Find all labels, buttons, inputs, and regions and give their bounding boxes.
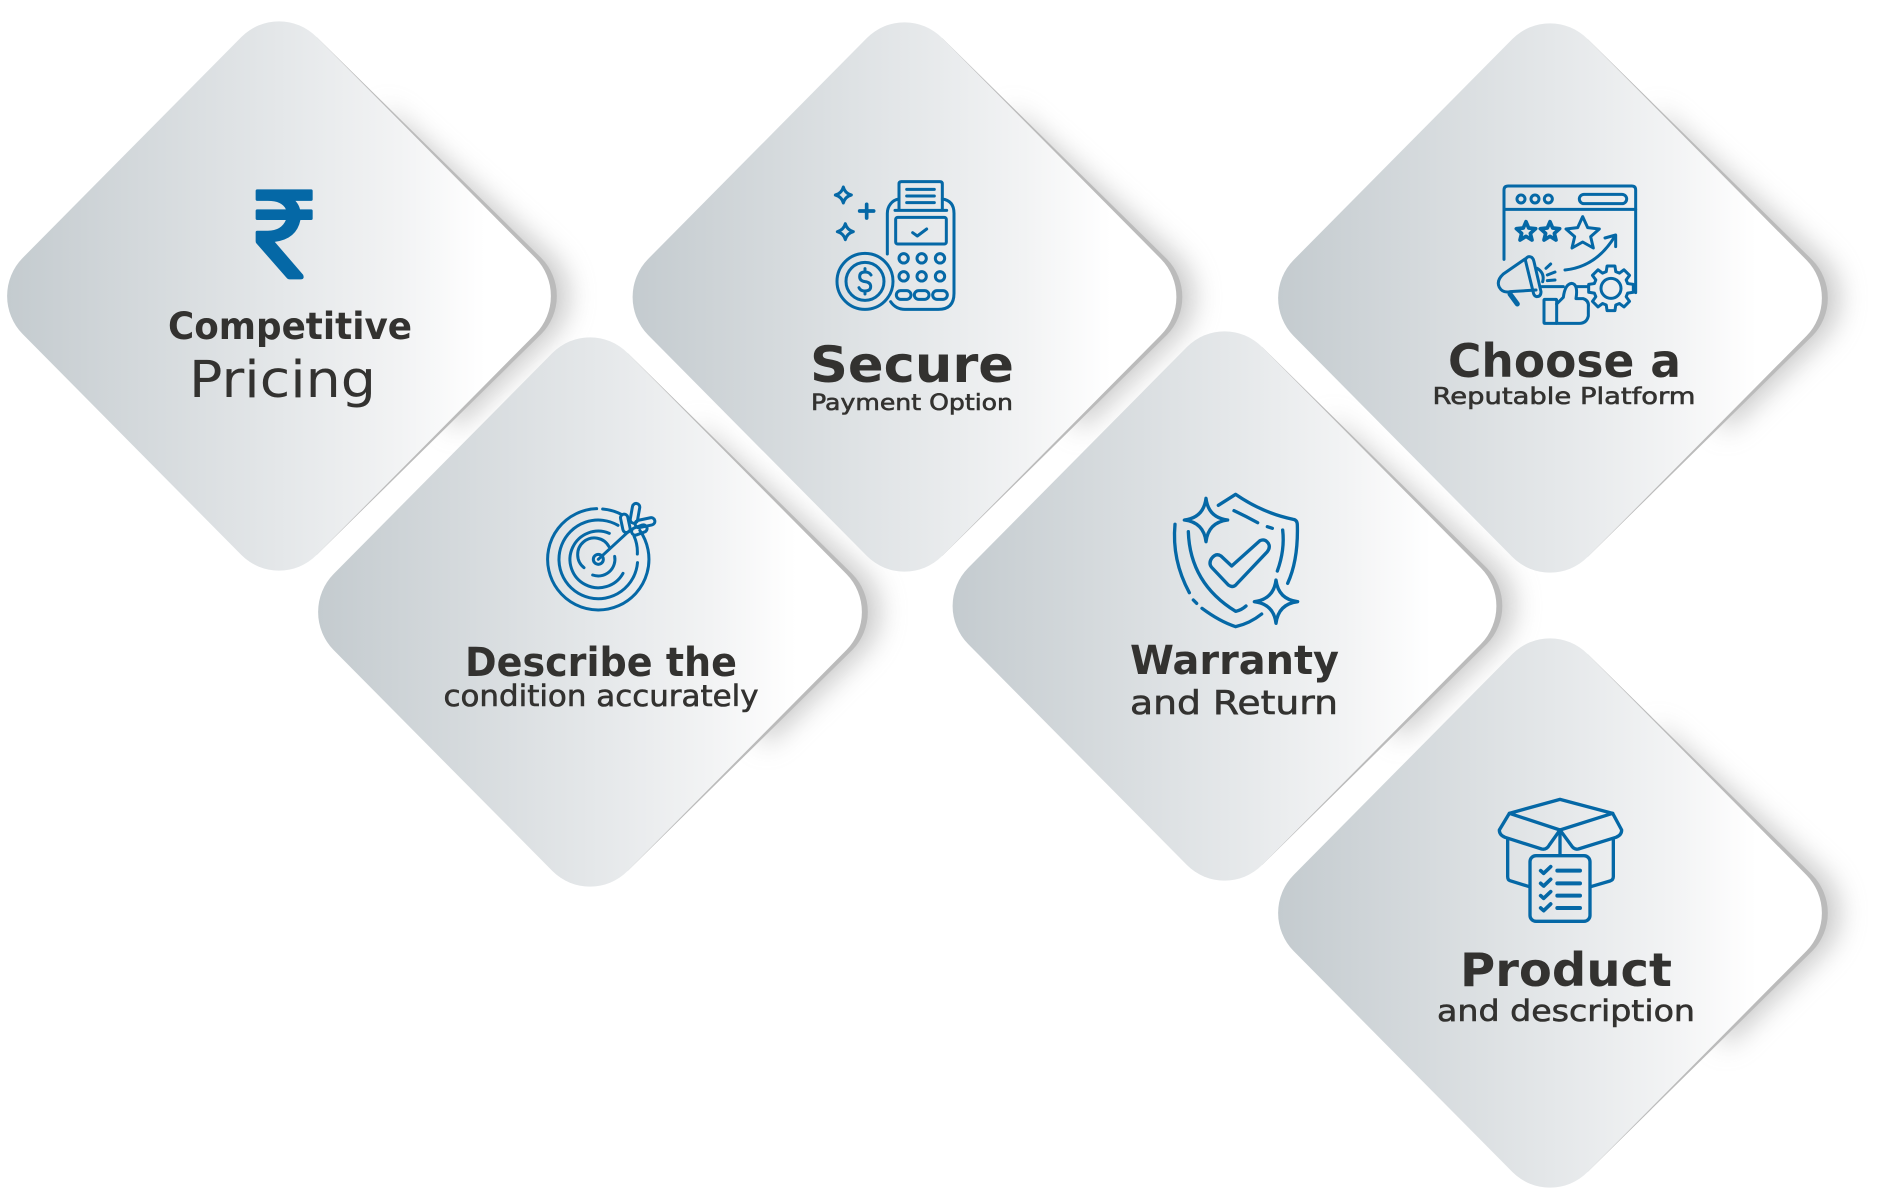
text: Pricing: Pricing <box>189 351 376 410</box>
text: Payment Option: Payment Option <box>811 391 1013 416</box>
icon: payment terminal <box>835 182 954 309</box>
text: and Return: and Return <box>1130 683 1338 722</box>
heading: Warranty: Warranty <box>1130 638 1339 684</box>
heading: Secure: Secure <box>810 336 1014 394</box>
icon: target with arrow <box>548 503 656 610</box>
card: choose a reputable platform <box>1278 23 1839 573</box>
text: and description: and description <box>1437 994 1695 1028</box>
card: describe the condition <box>318 337 879 887</box>
icon: rupee <box>256 189 313 279</box>
panel: describe the condition <box>318 337 879 887</box>
panel: competitive pricing <box>7 21 568 571</box>
text: condition accurately: condition accurately <box>444 679 758 713</box>
heading: Product: Product <box>1460 943 1672 997</box>
heading: Competitive: Competitive <box>168 305 412 348</box>
panel: choose a reputable platform <box>1278 23 1839 573</box>
heading: Choose a: Choose a <box>1448 334 1681 388</box>
icon: shield with check <box>1174 494 1298 627</box>
panel: warranty and return <box>953 331 1513 881</box>
icon: open box with checklist <box>1499 799 1622 921</box>
card: competitive pricing <box>7 21 568 571</box>
panel: secure payment <box>633 22 1193 572</box>
card: product and description <box>1278 638 1839 1188</box>
icon: browser with rating, megaphone, thumb and gear <box>1498 186 1636 323</box>
card: warranty and return <box>953 331 1513 881</box>
text: Reputable Platform: Reputable Platform <box>1432 384 1696 410</box>
card: secure payment <box>633 22 1193 572</box>
heading: Describe the: Describe the <box>465 640 737 686</box>
panel: product and description <box>1278 638 1839 1188</box>
